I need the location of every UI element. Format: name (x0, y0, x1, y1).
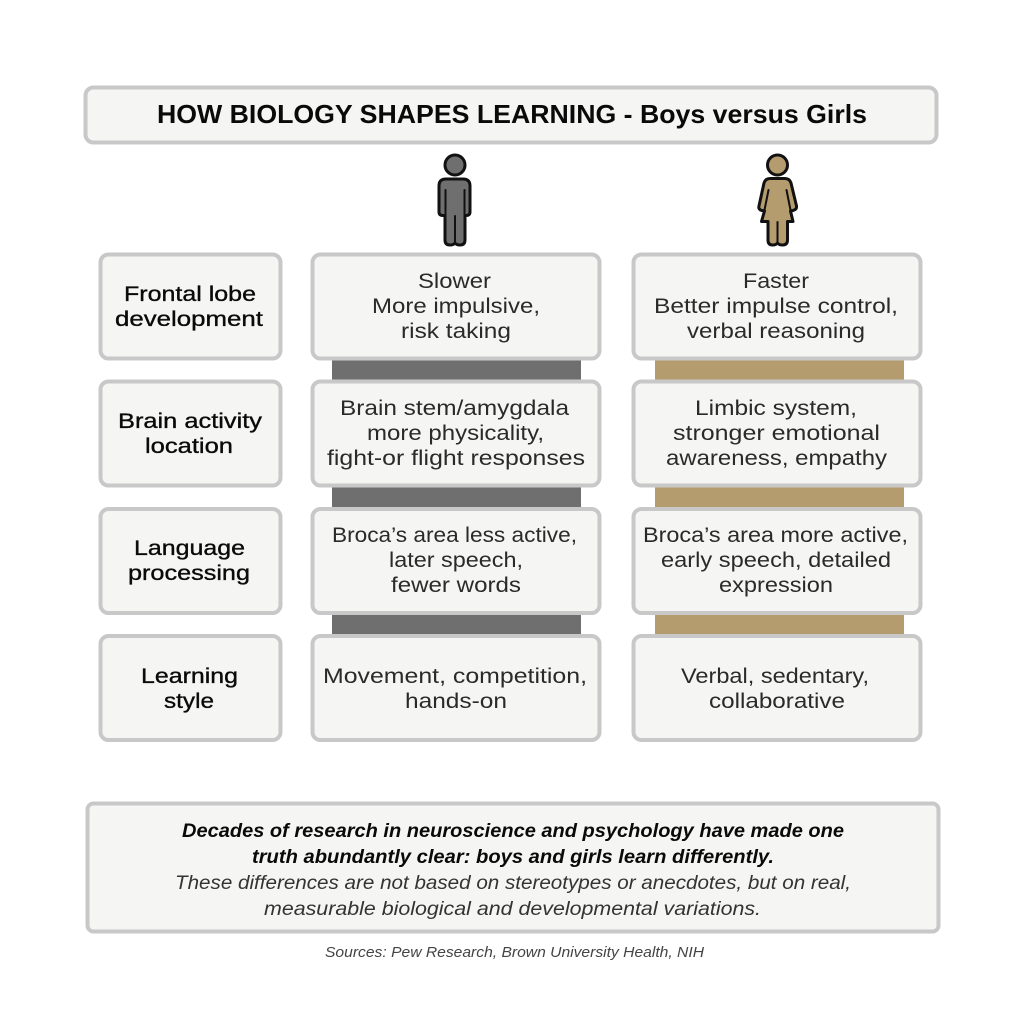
connector bars: girls column (655, 359, 904, 635)
boys: brain activity: more physicality, (367, 421, 544, 445)
girls: brain activity: stronger emotional (673, 421, 880, 445)
row label: learning style (100, 636, 280, 740)
row label: language processing: processing (128, 561, 250, 585)
girls: learning style: collaborative (709, 689, 845, 713)
boys: brain activity (312, 382, 600, 486)
girls: learning style: Verbal, sedentary, (681, 664, 869, 688)
sources: Sources: Pew Research, Brown University Health, NIH (325, 945, 705, 961)
row label: brain activity location (100, 382, 280, 486)
boys: brain activity: Brain stem/amygdala (340, 396, 569, 420)
girls: frontal lobe: verbal reasoning (687, 319, 865, 343)
boys: frontal lobe (312, 254, 600, 358)
row label: brain activity location: Brain activity (118, 409, 262, 433)
boys: learning style (312, 636, 600, 740)
girls: language: early speech, detailed (661, 548, 891, 572)
row label: learning style: Learning (141, 664, 238, 688)
girls: language (634, 509, 920, 613)
boys: language: later speech, (389, 548, 523, 572)
boys: learning style: hands-on (405, 689, 507, 713)
row label: brain activity location: location (145, 434, 233, 458)
row label: language processing (100, 509, 280, 613)
boys: frontal lobe: Slower (418, 269, 491, 293)
girls: learning style (634, 636, 920, 740)
girls: frontal lobe: Faster (743, 269, 809, 293)
summary callout: These differences are not based on stereotypes or anecdotes, but on real, (175, 872, 851, 894)
girls: language: expression (719, 573, 833, 597)
title: HOW BIOLOGY SHAPES LEARNING - Boys versus Girls (157, 99, 867, 129)
title (86, 88, 936, 142)
boys: language: Broca’s area less active, (332, 523, 577, 547)
summary callout (88, 804, 938, 932)
boys: brain activity: fight-or flight responses (327, 446, 585, 470)
icon: girl figure (759, 155, 797, 245)
girls: frontal lobe (634, 254, 920, 358)
boys: language (312, 509, 600, 613)
icon: boy figure (439, 155, 470, 245)
girls: frontal lobe: Better impulse control, (654, 294, 898, 318)
boys: learning style: Movement, competition, (323, 664, 587, 688)
boys: frontal lobe: risk taking (401, 319, 511, 343)
girls: brain activity: Limbic system, (695, 396, 857, 420)
summary callout: measurable biological and developmental variations. (264, 898, 761, 920)
summary callout: Decades of research in neuroscience and psychology have made one (182, 820, 844, 842)
row label: frontal lobe development (100, 254, 280, 358)
boys: language: fewer words (391, 573, 521, 597)
girls: language: Broca’s area more active, (643, 523, 908, 547)
row label: language processing: Language (134, 536, 245, 560)
row label: frontal lobe development: Frontal lobe (124, 282, 256, 306)
girls: brain activity: awareness, empathy (666, 446, 887, 470)
girls: brain activity (634, 382, 920, 486)
row label: learning style: style (164, 689, 214, 713)
summary callout: truth abundantly clear: boys and girls learn differently. (252, 846, 774, 868)
connector bars: boys column (332, 359, 581, 635)
boys: frontal lobe: More impulsive, (372, 294, 540, 318)
row label: frontal lobe development: development (115, 307, 263, 331)
